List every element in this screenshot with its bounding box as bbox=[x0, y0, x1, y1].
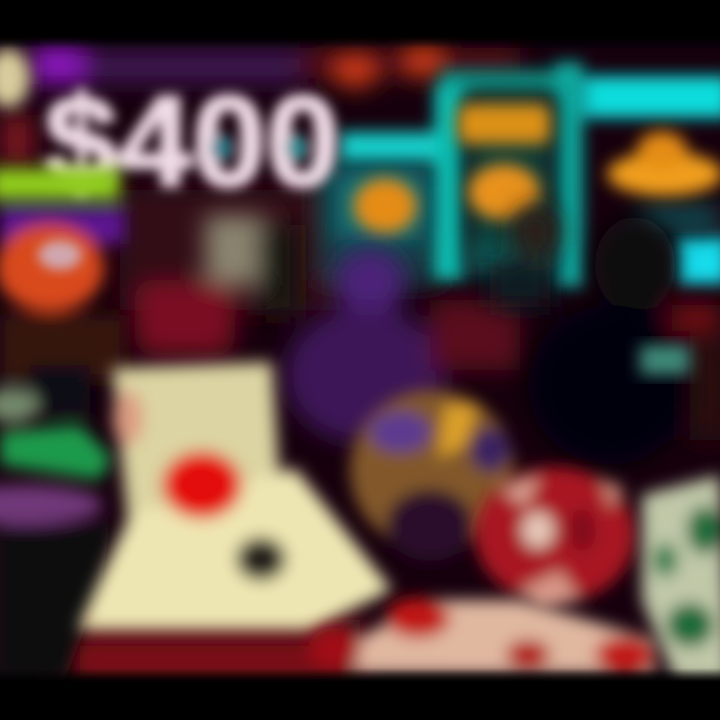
left side characters bbox=[0, 168, 125, 680]
green poker chips bbox=[642, 475, 720, 680]
red poker chips bbox=[475, 467, 635, 610]
letterbox band: bottom bbox=[0, 682, 720, 720]
dim teal panels bbox=[335, 96, 720, 275]
neon cyan frames bbox=[340, 62, 720, 287]
top strip: purple and red lights bbox=[0, 44, 520, 165]
right side figures bbox=[490, 204, 720, 465]
face detail on left character bbox=[38, 240, 82, 270]
hat at top-left corner bbox=[0, 48, 30, 108]
playing card bbox=[78, 362, 392, 630]
letterbox band: top fade bbox=[0, 36, 720, 48]
green cuff on right figure bbox=[640, 345, 690, 375]
center figures bbox=[135, 215, 520, 443]
gold and purple chip bbox=[350, 390, 514, 561]
letterbox band: bottom fade bbox=[0, 668, 720, 682]
letterbox band: top bbox=[0, 0, 720, 36]
bottom table with chips bbox=[80, 598, 655, 676]
orange sombreros bbox=[353, 104, 720, 234]
headline: $400: $400 bbox=[44, 68, 340, 214]
